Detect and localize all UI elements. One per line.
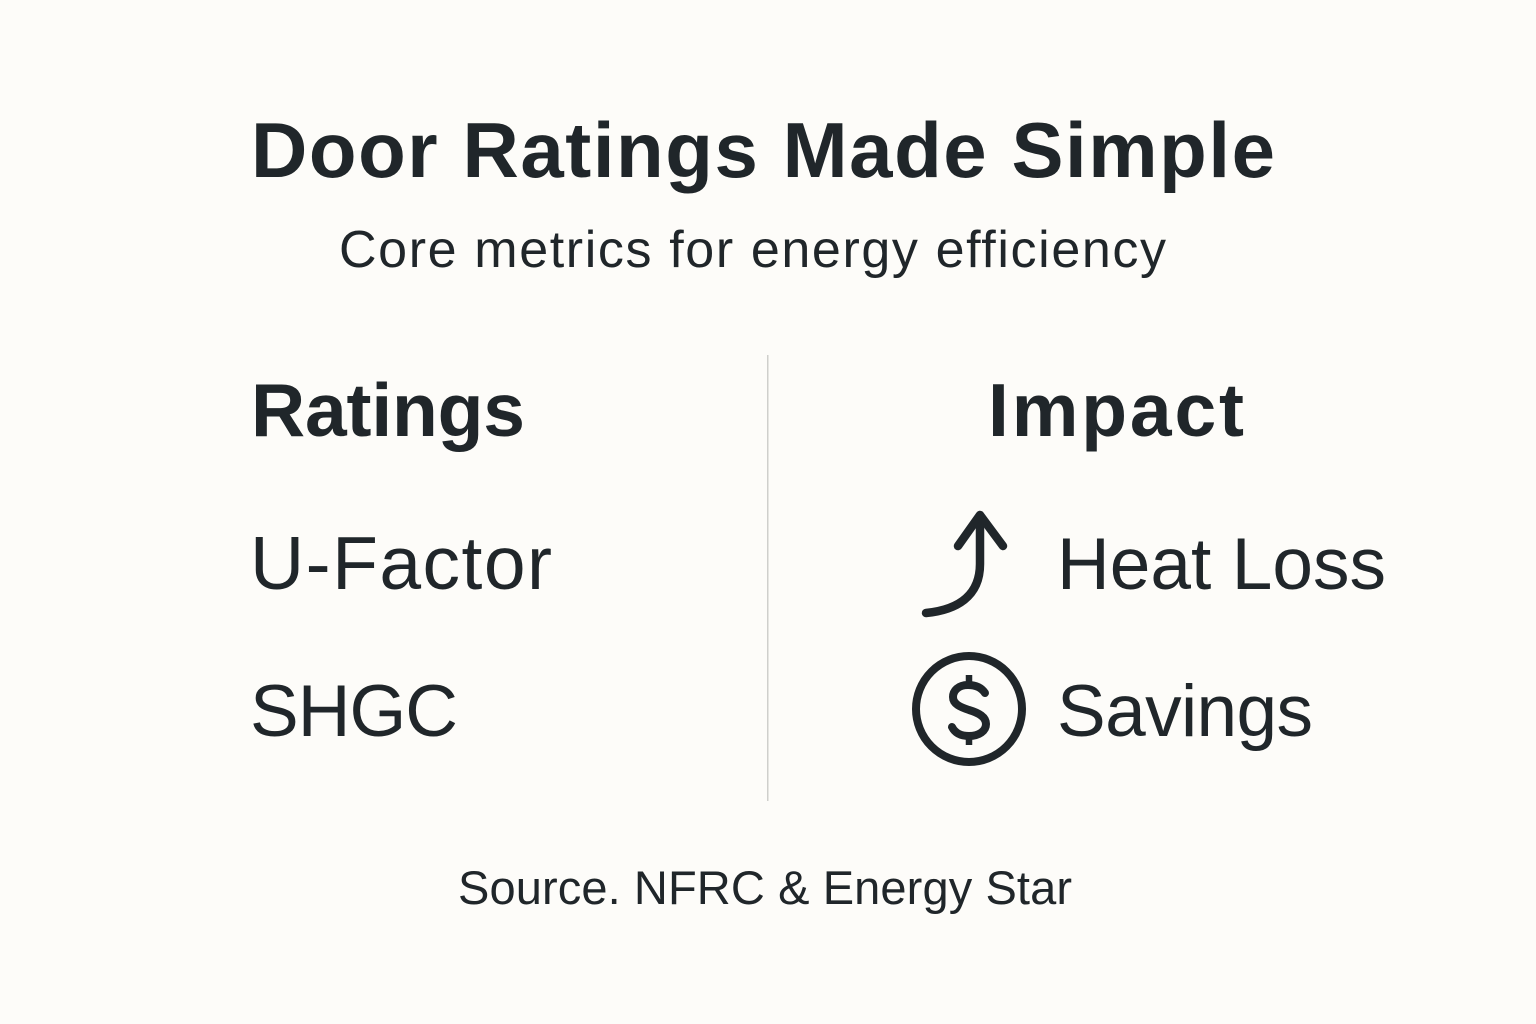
rating: SHGC: SHGC [250, 671, 458, 752]
source note: Source. NFRC & Energy Star [458, 861, 1072, 914]
heading: impact: Impact [988, 368, 1244, 452]
subtitle: Core metrics for energy efficiency [339, 221, 1166, 279]
title: Door Ratings Made Simple [251, 106, 1275, 194]
label: savings: Savings [1057, 671, 1313, 752]
panel: ratings [250, 368, 552, 752]
heading: ratings: Ratings [251, 368, 525, 452]
label: heat loss: Heat Loss [1057, 524, 1386, 605]
rating: U-Factor: U-Factor [250, 521, 552, 605]
panel: impact [916, 368, 1386, 762]
icon: dollar coin [916, 656, 1022, 762]
icon: curved up arrow [926, 515, 1003, 613]
